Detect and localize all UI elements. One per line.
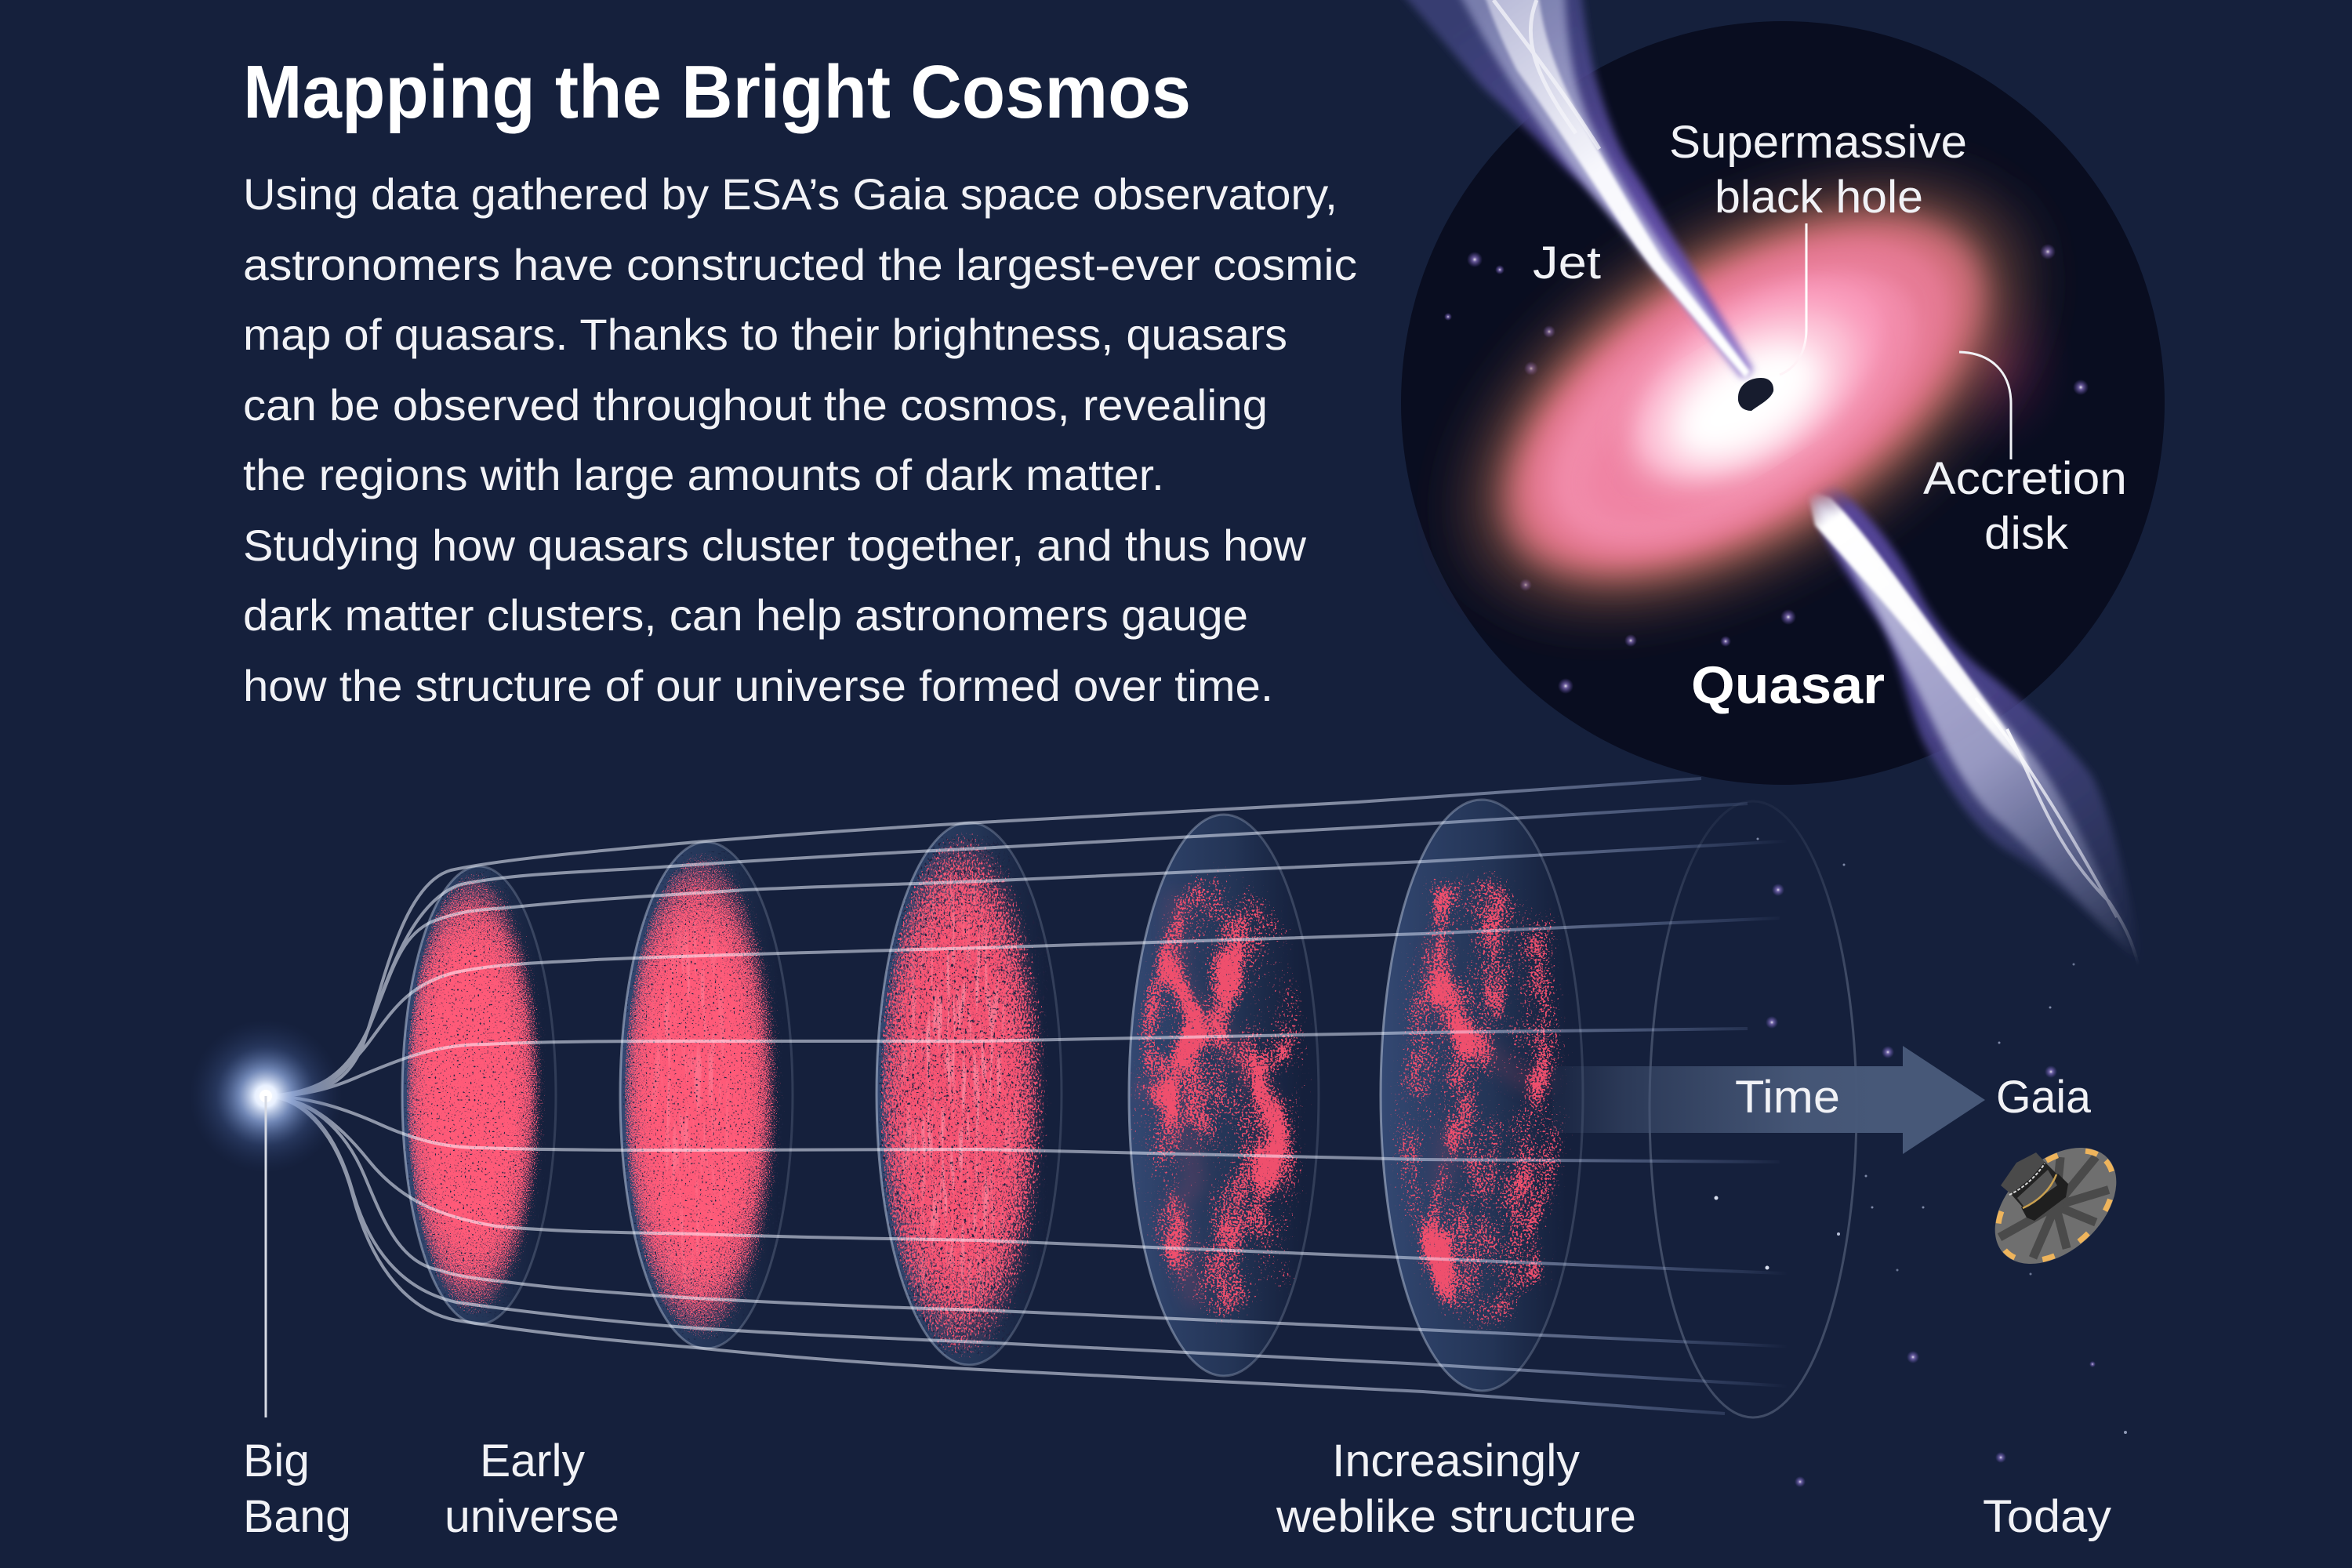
panel: quasar circle bbox=[1360, 0, 2165, 972]
slice 3 bbox=[877, 822, 1062, 1365]
label: gaia: Gaia bbox=[1996, 1072, 2092, 1123]
label: early universe bbox=[445, 1436, 619, 1542]
expanding universe lines bbox=[266, 779, 1813, 1414]
label: today: Today bbox=[1983, 1491, 2111, 1542]
body text: dark matter clusters, can help astronomers gauge bbox=[243, 590, 1248, 640]
label: supermassive black hole bbox=[1669, 117, 1967, 223]
icon: black hole bbox=[1738, 378, 1773, 411]
title: Mapping the Bright Cosmos bbox=[243, 50, 1191, 134]
big bang glow bbox=[189, 1019, 343, 1173]
background stars bbox=[1714, 837, 2127, 1487]
label: quasar: Quasar bbox=[1691, 655, 1885, 715]
label: accretion disk bbox=[1923, 453, 2127, 559]
label: early universe: Early bbox=[480, 1436, 585, 1486]
slice 1: early universe bbox=[402, 866, 556, 1324]
body text: how the structure of our universe formed over time. bbox=[243, 661, 1273, 710]
body text bbox=[243, 169, 1357, 710]
label: increasingly weblike structure bbox=[1276, 1436, 1636, 1542]
label: supermassive black hole: Supermassive bbox=[1669, 117, 1967, 168]
label: supermassive black hole: black hole bbox=[1715, 172, 1923, 223]
dark magenta glow bbox=[1962, 308, 2055, 436]
body text: Using data gathered by ESA’s Gaia space observatory, bbox=[243, 169, 1338, 219]
label: increasingly weblike structure: weblike structure bbox=[1276, 1491, 1636, 1542]
body text: Studying how quasars cluster together, and thus how bbox=[243, 521, 1307, 570]
label: big bang bbox=[243, 1436, 351, 1542]
top jet bbox=[1388, 0, 1753, 378]
label: accretion disk: Accretion bbox=[1923, 453, 2127, 504]
body text: astronomers have constructed the largest-ever cosmic bbox=[243, 240, 1357, 289]
label: increasingly weblike structure: Increasingly bbox=[1332, 1436, 1580, 1486]
label: big bang: Bang bbox=[243, 1491, 351, 1542]
big bang leader line bbox=[265, 1096, 267, 1417]
slice 5: weblike bbox=[1381, 800, 1583, 1391]
slice 2 bbox=[620, 842, 793, 1348]
body text: the regions with large amounts of dark matter. bbox=[243, 450, 1164, 499]
time arrow bbox=[1552, 1046, 1985, 1154]
label: accretion disk: disk bbox=[1984, 508, 2069, 559]
time label: Time bbox=[1735, 1072, 1840, 1123]
label: early universe: universe bbox=[445, 1491, 619, 1542]
accretion disk bbox=[1360, 62, 2132, 728]
callout: accretion disk leader bbox=[1959, 352, 2011, 459]
quasar stars bbox=[1444, 244, 2089, 694]
callout: black hole leader bbox=[1780, 223, 1806, 375]
body text: can be observed throughout the cosmos, revealing bbox=[243, 380, 1268, 430]
label: big bang: Big bbox=[243, 1436, 310, 1486]
slice 6: empty present-day boundary bbox=[1650, 801, 1857, 1417]
label: jet: Jet bbox=[1533, 238, 1601, 289]
icon: gaia spacecraft bbox=[1973, 1125, 2139, 1287]
body text: map of quasars. Thanks to their brightness, quasars bbox=[243, 310, 1287, 359]
bottom jet bbox=[1803, 482, 2144, 972]
slice 4: weblike bbox=[1129, 815, 1319, 1376]
